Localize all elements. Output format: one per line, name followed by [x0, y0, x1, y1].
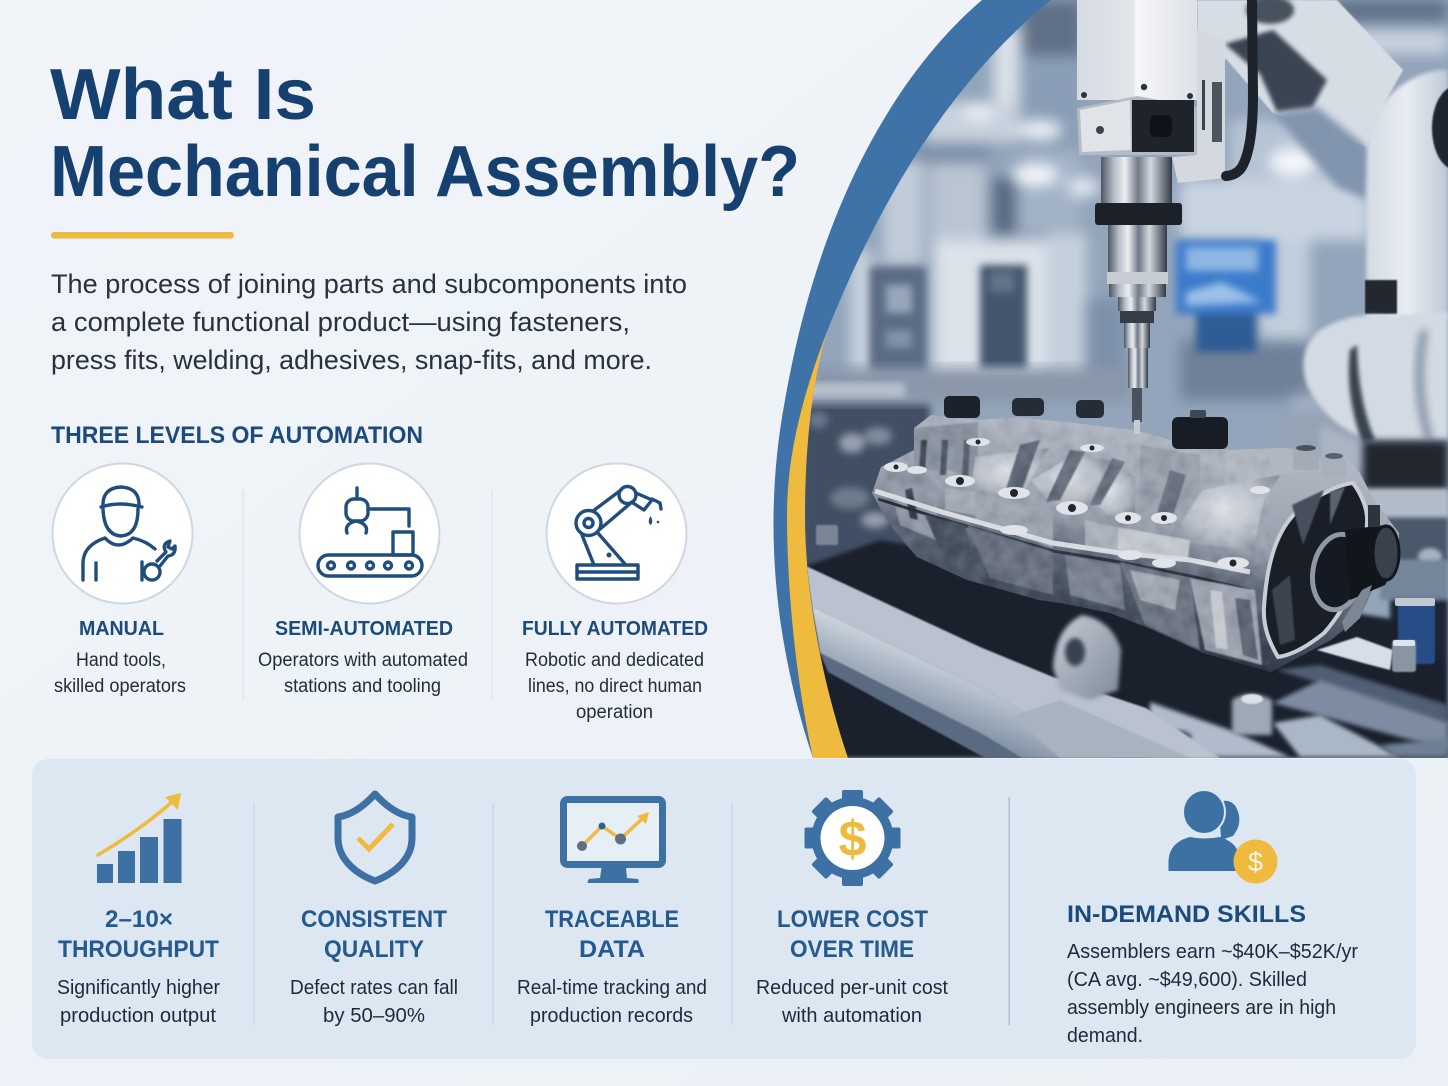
text: quality: Defect rates can fall	[290, 977, 458, 999]
text: lower cost: Reduced per-unit cost	[756, 977, 948, 999]
heading: traceable data: DATA	[579, 936, 645, 963]
hero photo: robotic spindle over engine housing	[780, 0, 1448, 758]
icon: shield with check	[338, 794, 412, 881]
heading: traceable data	[545, 906, 679, 963]
text: quality: by 50–90%	[323, 1005, 425, 1027]
description: semi-automated	[258, 650, 468, 697]
heading: throughput: THROUGHPUT	[58, 936, 219, 963]
text: lower cost	[756, 977, 948, 1027]
intro paragraph: a complete functional product—using fasteners,	[51, 307, 630, 337]
description: manual	[54, 650, 186, 697]
description: manual: skilled operators	[54, 676, 186, 697]
section heading: three levels of automation: THREE LEVELS OF AUTOMATION	[51, 422, 423, 449]
benefit: lower cost	[756, 790, 948, 1027]
metal texture	[874, 418, 1270, 664]
description: semi-automated: Operators with automated	[258, 650, 468, 671]
description: fully automated: Robotic and dedicated	[525, 650, 704, 671]
description: semi-automated: stations and tooling	[284, 676, 441, 697]
description: manual: Hand tools,	[76, 650, 166, 671]
benefit: quality	[290, 794, 458, 1027]
automation level: manual	[52, 464, 192, 697]
blurred dark windows	[870, 265, 1027, 373]
foreground lug and fittings	[1053, 598, 1435, 735]
benefit: throughput	[57, 793, 220, 1027]
automation level: fully automated	[522, 464, 708, 723]
black cable	[1226, 0, 1253, 176]
bolt bosses	[884, 438, 1270, 569]
title underline	[51, 232, 234, 238]
text: throughput: production output	[60, 1005, 216, 1027]
icon: monitor with line chart	[564, 800, 662, 883]
benefit: in-demand skills	[1067, 790, 1358, 1047]
heading: throughput	[58, 906, 219, 963]
automation level: semi-automated	[258, 464, 468, 697]
text: in-demand skills: (CA avg. ~$49,600). Skilled	[1067, 969, 1307, 991]
title: Mechanical Assembly?	[50, 132, 800, 212]
icon: robot arm	[546, 464, 686, 604]
seam flange	[875, 491, 1250, 572]
upper bosses and fins	[887, 422, 1280, 558]
label: semi-automated: SEMI-AUTOMATED	[275, 618, 453, 640]
heading: quality	[301, 906, 447, 963]
end bell housing	[1264, 483, 1367, 657]
text: traceable data	[517, 977, 707, 1027]
description: fully automated: operation	[576, 702, 653, 723]
heading: throughput: 2–10×	[105, 906, 173, 933]
heading: traceable data: TRACEABLE	[545, 906, 679, 933]
blurred parts on the left of the bench	[800, 368, 1130, 592]
curved yellow accent band	[787, 334, 870, 758]
output shaft	[1307, 525, 1399, 632]
spindle tool head	[1077, 0, 1253, 434]
dark under-bench area	[800, 540, 1448, 758]
engine housing	[860, 410, 1410, 680]
heading: lower cost	[777, 906, 928, 963]
text: lower cost: with automation	[781, 1005, 922, 1027]
icon: gear with dollar sign: $	[839, 811, 867, 867]
icon: people with coin: $	[1248, 847, 1263, 877]
benefit: traceable data	[517, 800, 707, 1027]
heading: quality: CONSISTENT	[301, 906, 447, 933]
text: in-demand skills: Assemblers earn ~$40K–$52K/yr	[1067, 941, 1358, 963]
icon: gear with dollar sign	[804, 790, 900, 886]
title	[50, 55, 800, 212]
text: in-demand skills: demand.	[1067, 1025, 1143, 1047]
curved blue accent band	[773, 0, 1448, 758]
icon: people with coin	[1168, 790, 1278, 884]
description: fully automated: lines, no direct human	[528, 676, 702, 697]
text: traceable data: Real-time tracking and	[517, 977, 707, 999]
intro paragraph	[51, 269, 687, 375]
heading: quality: QUALITY	[324, 936, 424, 963]
icon: gripper over conveyor	[300, 464, 440, 604]
heading: lower cost: LOWER COST	[777, 906, 928, 933]
blurred factory background	[850, 0, 1448, 450]
heading: lower cost: OVER TIME	[790, 936, 914, 963]
title: What Is	[50, 55, 316, 135]
label: fully automated: FULLY AUTOMATED	[522, 618, 708, 640]
text: quality	[290, 977, 458, 1027]
lower body	[925, 515, 1262, 665]
text: in-demand skills	[1067, 941, 1358, 1047]
blurred blue control screen	[1176, 240, 1276, 352]
text: traceable data: production records	[530, 1005, 693, 1027]
text: in-demand skills: assembly engineers are in high	[1067, 997, 1336, 1019]
bench floor and rails on the right	[1150, 637, 1448, 757]
panel: benefits	[32, 759, 1416, 1059]
description: fully automated	[525, 650, 704, 723]
intro paragraph: press fits, welding, adhesives, snap-fits, and more.	[51, 345, 652, 375]
label: manual: MANUAL	[79, 618, 164, 640]
heading: in-demand skills: IN-DEMAND SKILLS	[1067, 901, 1306, 928]
text: throughput	[57, 977, 220, 1027]
intro paragraph: The process of joining parts and subcomponents into	[51, 269, 687, 299]
robot arm	[1197, 0, 1448, 670]
icon: worker with wrench	[52, 464, 192, 604]
icon: rising bar chart	[97, 793, 182, 883]
bench rail	[806, 566, 1220, 758]
text: throughput: Significantly higher	[57, 977, 220, 999]
black caps and fittings on top of the housing	[944, 396, 1380, 527]
